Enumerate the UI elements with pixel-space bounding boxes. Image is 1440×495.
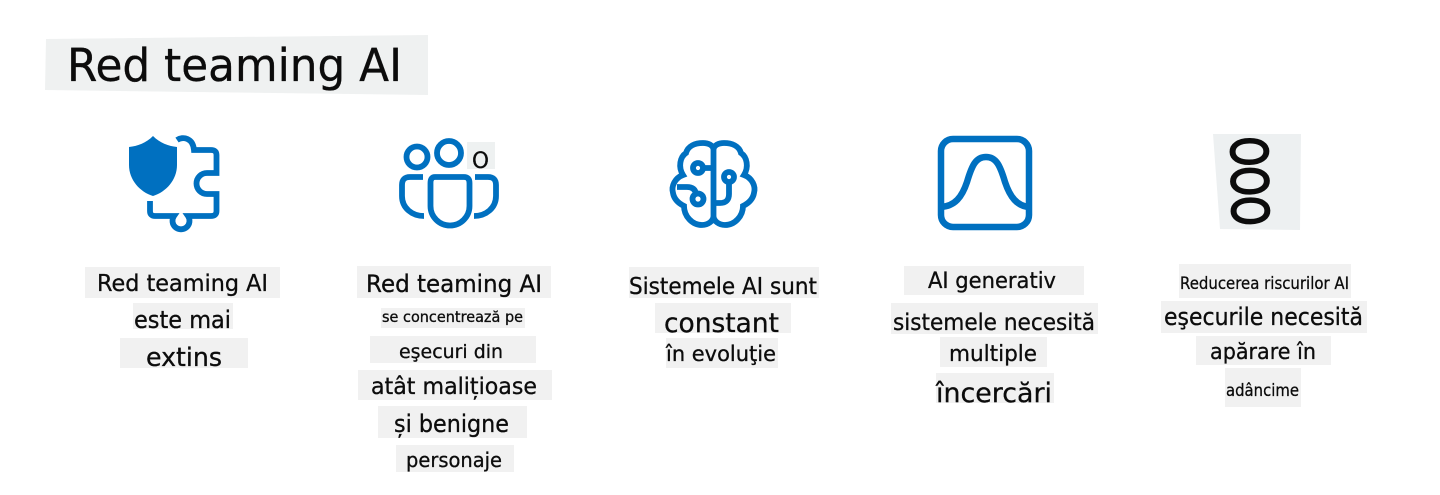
icon: rotated OOO placeholder	[1213, 134, 1301, 230]
text: Sistemele AI sunt constant în evoluţie: în evoluţie	[665, 342, 776, 366]
text: Reducerea riscurilor AI eşecurile necesită apărare în adâncime: apărare în	[1210, 340, 1316, 365]
panel: malicious and benign failures	[357, 141, 552, 472]
text: Reducerea riscurilor AI eşecurile necesită apărare în adâncime: Reducerea riscurilor AI	[1180, 274, 1349, 294]
panel: generative AI needs multiple attempts	[891, 139, 1098, 409]
text: Red teaming AI se concentrează pe eşecuri: eşecuri din	[399, 341, 503, 363]
text: Red teaming AI se concentrează pe eşecuri: se concentrează pe	[382, 308, 523, 326]
icon: group of people	[402, 141, 496, 226]
panel: mitigation needs defence in depth	[1161, 134, 1367, 407]
text: Reducerea riscurilor AI eşecurile necesită apărare în adâncime	[1161, 264, 1367, 407]
icon: bell curve in rounded square	[941, 139, 1029, 227]
icon: rotated OOO placeholder: OOO	[1219, 136, 1279, 226]
text: Sistemele AI sunt constant în evoluţie: constant	[664, 308, 779, 339]
text: AI generativ sistemele necesită multiple încercări: AI generativ	[928, 269, 1056, 294]
text: Red teaming AI se concentrează pe eşecuri: personaje	[406, 448, 502, 472]
text: Red teaming AI se concentrează pe eşecuri: Red teaming AI	[366, 270, 542, 298]
text: AI generativ sistemele necesită multiple încercări: multiple	[949, 342, 1037, 367]
text: Red teaming AI este mai extins: extins	[146, 343, 222, 373]
stray letter O	[467, 142, 495, 174]
text: Red teaming AI este mai extins: este mai	[134, 306, 231, 334]
text: Reducerea riscurilor AI eşecurile necesită apărare în adâncime: eşecurile necesită	[1164, 303, 1363, 331]
text: Sistemele AI sunt constant în evoluţie	[629, 267, 819, 368]
text: AI generativ sistemele necesită multiple încercări	[891, 266, 1098, 409]
text: AI generativ sistemele necesită multiple încercări: sistemele necesită	[893, 310, 1095, 336]
stray letter O: O	[472, 149, 489, 174]
text: Sistemele AI sunt constant în evoluţie: Sistemele AI sunt	[629, 274, 817, 300]
icon: shield and puzzle piece	[129, 136, 216, 229]
text: Red teaming AI se concentrează pe eşecuri: atât malițioase	[371, 374, 537, 400]
title: Red teaming AI	[67, 39, 402, 92]
text: Red teaming AI este mai extins: Red teaming AI	[97, 271, 268, 297]
text: Reducerea riscurilor AI eşecurile necesită apărare în adâncime: adâncime	[1226, 381, 1299, 401]
panel: red teaming is broader	[85, 136, 280, 373]
icon: brain with circuits	[672, 143, 755, 225]
text: Red teaming AI se concentrează pe eşecuri: și benigne	[394, 410, 509, 438]
text: Red teaming AI se concentrează pe eşecuri	[357, 266, 552, 472]
text: Red teaming AI este mai extins	[85, 267, 280, 373]
text: AI generativ sistemele necesită multiple încercări: încercări	[935, 378, 1052, 409]
panel: systems constantly evolving	[629, 143, 819, 368]
